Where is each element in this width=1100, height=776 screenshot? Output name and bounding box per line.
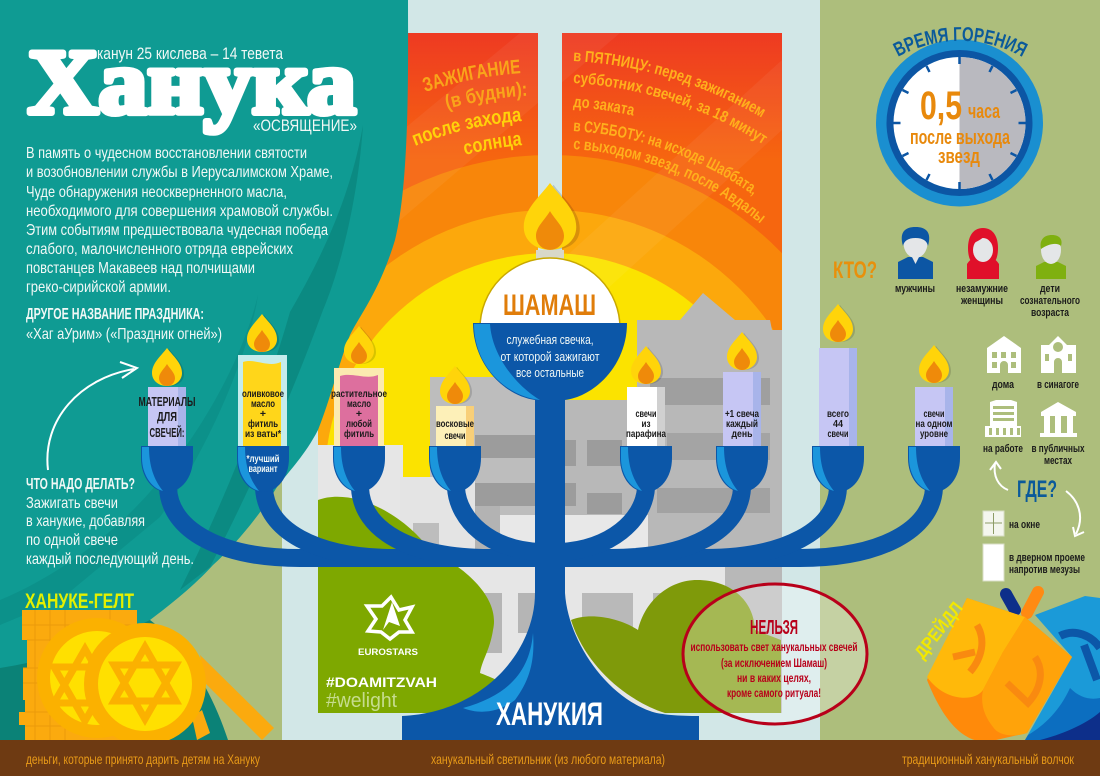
buildings right [562, 293, 782, 715]
candle 1: materials: ДЛЯ [157, 410, 177, 424]
candle 2: olive oil: масло [251, 398, 275, 410]
candle 8: one level: свечи [924, 408, 944, 420]
clock value: звезд [938, 146, 980, 168]
hanukkiah caption: ханукальный светильник (из любого материала) [431, 751, 665, 767]
candle 3: vegetable oil: фитиль [344, 428, 374, 440]
date: канун 25 кислева – 14 тевета [97, 44, 283, 63]
candle 2: olive oil: фитиль [248, 418, 278, 430]
forbidden callout: использовать свет ханукальных свечей [690, 642, 858, 654]
forbidden callout: (за исключением Шамаш) [721, 658, 827, 670]
what to do text: в ханукие, добавляя [26, 513, 145, 530]
clock value [910, 84, 1011, 168]
where heading: ГДЕ? [1017, 476, 1057, 503]
what to do text: Зажигать свечи [26, 495, 118, 512]
candle 2: olive oil: оливковое [242, 388, 284, 400]
intro text block: и возобновлении службы в Иерусалимском Храме, [26, 164, 333, 181]
gelt heading: ХАНУКЕ-ГЕЛТ [25, 590, 134, 613]
Friday and Saturday text: субботних свечей, за 18 минут [574, 73, 768, 144]
candle 5: paraffin: из [642, 418, 650, 430]
shamash description: служебная свечка, [506, 333, 594, 347]
woman label [956, 283, 1008, 307]
shamash flame [524, 183, 580, 250]
candle 3: vegetable oil: растительное [331, 388, 387, 400]
woman label: женщины [960, 295, 1003, 307]
best option note: вариант [248, 463, 278, 475]
chanukah gelt [19, 590, 274, 745]
dreidel [910, 592, 1100, 742]
best option note: *лучший [246, 453, 280, 465]
door label [1009, 552, 1085, 576]
icon: window [983, 511, 1004, 536]
lighting on weekdays text: солнца [464, 134, 522, 154]
eurostars logo and hashtags: EUROSTARS [358, 647, 418, 658]
Friday and Saturday text: с выходом звезд, после Авдалы [574, 140, 765, 223]
burning time heading: ВРЕМЯ ГОРЕНИЯ [892, 27, 1028, 57]
candle 7: total 44: свечи [828, 428, 848, 440]
clock value: 0,5 [920, 84, 962, 128]
fallen coins [192, 655, 274, 740]
intro text block: повстанцев Макавеев над полчищами [26, 260, 255, 277]
clock value: часа [968, 101, 1001, 123]
eurostars logo and hashtags [326, 597, 437, 712]
candle 3: vegetable oil: масло [347, 398, 371, 410]
forbidden callout: НЕЛЬЗЯ [750, 617, 798, 639]
window label: на окне [1009, 519, 1040, 531]
right bush [571, 580, 781, 713]
candle 1: materials: СВЕЧЕЙ: [150, 425, 184, 440]
bottom strip [0, 740, 1100, 776]
candle 5: paraffin: свечи [636, 408, 656, 420]
woman label: незамужние [956, 283, 1008, 295]
front coin [84, 623, 206, 745]
child label: сознательного [1020, 295, 1080, 307]
Friday and Saturday text: в ПЯТНИЦУ: перед зажиганием [574, 50, 766, 118]
arms [168, 488, 934, 558]
base highlight [463, 633, 533, 712]
Friday and Saturday text: в СУББОТУ: на исходе Шаббата, [574, 121, 754, 196]
icon: door [983, 544, 1004, 581]
hanukkiah label: ХАНУКИЯ [496, 696, 603, 732]
intro text block: Чуде обнаружения неоскверненного масла, [26, 184, 287, 201]
arrow down to window and door [1066, 491, 1084, 536]
left curtain [0, 0, 408, 745]
central stem and base [402, 395, 699, 740]
child label [1020, 283, 1080, 319]
shamash title: ШАМАШ [503, 289, 596, 322]
arrow to candles [47, 362, 137, 470]
window panes with sunrise [318, 33, 782, 713]
shamash candle [473, 183, 627, 400]
child label: дети [1040, 283, 1060, 295]
Friday and Saturday text [572, 50, 768, 223]
what to do text: каждый последующий день. [26, 551, 194, 568]
eurostars logo and hashtags: #welight [326, 690, 397, 712]
gelt caption: деньги, которые принято дарить детям на Хануку [26, 751, 260, 767]
back coin [37, 618, 157, 738]
other name of the holiday: «Хаг аУрим» («Праздник огней») [26, 326, 222, 343]
handles [1006, 594, 1015, 610]
what to do text: ЧТО НАДО ДЕЛАТЬ? [26, 476, 135, 493]
what to do text: по одной свече [26, 532, 118, 549]
candle 4: wax [429, 366, 481, 492]
shamash bowl [473, 323, 627, 400]
candle 3: vegetable oil [331, 326, 387, 492]
candle 3: vegetable oil: любой [346, 418, 372, 430]
shamash description: от которой зажигают [500, 350, 600, 364]
shamash dome [480, 258, 620, 398]
icon: child [1036, 235, 1066, 279]
other name of the holiday: ДРУГОЕ НАЗВАНИЕ ПРАЗДНИКА: [26, 306, 204, 323]
candle 6: one more each day [716, 332, 768, 492]
candle 2: olive oil: + [260, 408, 266, 420]
icon: man [898, 227, 933, 279]
Friday and Saturday text: до заката [572, 98, 634, 116]
icon: synagogue [1041, 336, 1076, 373]
burning time clock [876, 27, 1043, 206]
intro text block [26, 145, 333, 296]
candle 8: one level [908, 345, 960, 492]
window frame [282, 0, 820, 740]
forbidden callout [683, 584, 867, 724]
subtitle: «ОСВЯЩЕНИЕ» [253, 116, 357, 135]
candle 6: one more each day: +1 свеча [725, 408, 759, 420]
intro text block: греко-сирийской армии. [26, 279, 171, 296]
back dreidel [1025, 596, 1100, 740]
candle 1: materials: МАТЕРИАЛЫ [138, 395, 196, 409]
synagogue label: в синагоге [1037, 379, 1079, 391]
forbidden callout: кроме самого ритуала! [727, 688, 821, 700]
icon: home [987, 336, 1021, 373]
candle 6: one more each day: день [732, 428, 753, 440]
home label: дома [992, 379, 1015, 391]
child label: возраста [1031, 307, 1070, 319]
intro text block: слабого, малочисленного отряда еврейских [26, 241, 293, 258]
arrow up to buildings [990, 462, 1008, 490]
public place label: местах [1044, 455, 1073, 467]
bush left [318, 497, 497, 715]
buildings left [318, 377, 535, 679]
intro text block: В память о чудесном восстановлении святости [26, 145, 307, 162]
man label: мужчины [895, 283, 935, 295]
lighting on weekdays text: после захода [412, 110, 522, 146]
other name of the holiday [26, 306, 222, 343]
candle 4: wax: свечи [444, 430, 466, 442]
front dreidel [927, 598, 1072, 742]
office label: на работе [983, 443, 1023, 455]
candle 5: paraffin [620, 346, 672, 492]
intro text block: необходимого для совершения храмовой службы. [26, 203, 333, 220]
candle 5: paraffin: парафина [626, 428, 666, 440]
lighting on weekdays text: (в будни): [446, 82, 526, 112]
eurostars logo and hashtags: #DOAMITZVAH [326, 674, 437, 690]
shamash description [500, 333, 600, 380]
forbidden callout: ни в каких целях, [737, 673, 811, 685]
clock value: после выхода [910, 127, 1011, 149]
candle 4: wax: восковые [436, 418, 474, 430]
what to do text [26, 476, 194, 568]
lighting on weekdays text [412, 60, 526, 154]
candle 6: one more each day: каждый [726, 418, 758, 430]
best option note [246, 453, 280, 475]
coin stack [19, 610, 137, 740]
candle 8: one level: уровне [920, 428, 948, 440]
candle 7: total 44: 44 [833, 418, 843, 430]
candle 7: total 44: всего [827, 408, 849, 420]
dreidel label: ДРЕЙДЛ [910, 598, 967, 662]
icon: woman [967, 228, 999, 279]
candle 3: vegetable oil: + [356, 408, 362, 420]
public place label [1032, 443, 1085, 467]
icon: public place [1040, 402, 1077, 437]
shamash description: все остальные [516, 366, 584, 380]
icon: office [985, 400, 1021, 437]
intro text block: Этим событиям предшествовала чудесная победа [26, 222, 328, 239]
candle 7: total 44 [812, 304, 864, 492]
who heading: КТО? [833, 257, 877, 284]
title: Ханука [28, 31, 356, 133]
candle 8: one level: на одном [916, 418, 953, 430]
candle 1: materials [138, 348, 196, 492]
lighting on weekdays text: ЗАЖИГАНИЕ [422, 60, 520, 91]
candle 2: olive oil: из ваты* [245, 428, 282, 440]
candle 2: olive oil [237, 314, 289, 492]
clock ticks [894, 57, 1026, 189]
hanukkiah menorah [168, 395, 934, 740]
